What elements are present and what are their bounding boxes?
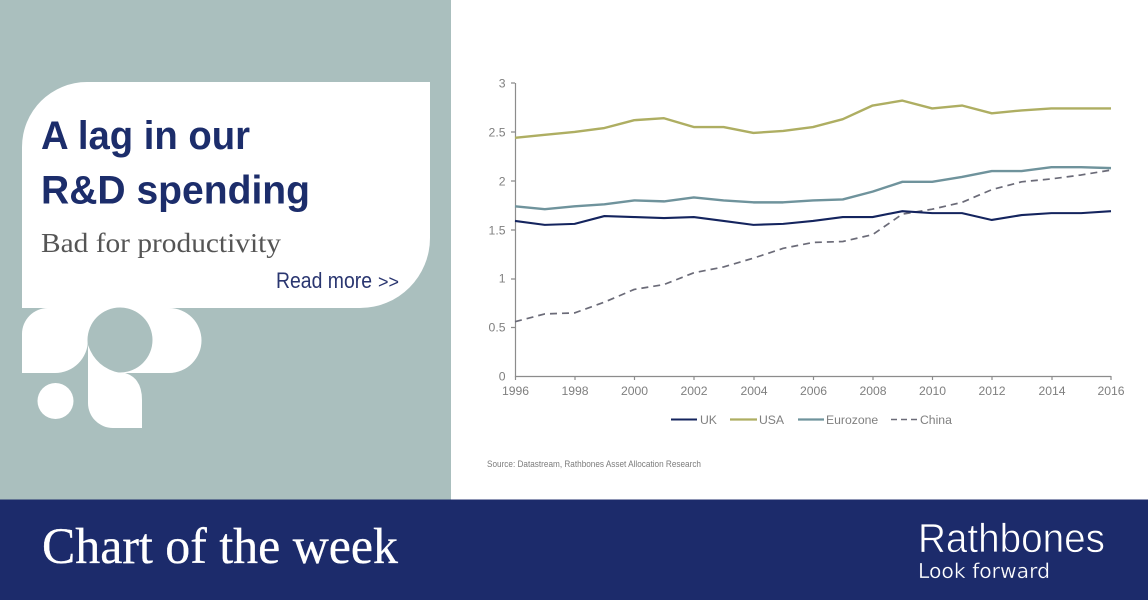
series lines <box>515 101 1111 322</box>
series: UK <box>515 211 1111 225</box>
title: A lag in our <box>41 114 250 158</box>
logo: Rathbones: Rathbones <box>918 515 1105 561</box>
source note: Source: Datastream, Rathbones Asset Allocation Research <box>487 459 701 469</box>
footer heading: Chart of the week <box>42 519 398 575</box>
x axis labels <box>502 384 1125 398</box>
title: R&D spending <box>41 168 310 212</box>
legend: China <box>920 413 952 427</box>
y axis labels: 1.5 <box>489 224 506 238</box>
y axis labels: 2.5 <box>489 126 506 140</box>
left panel background <box>0 0 451 500</box>
x axis labels: 2006 <box>800 384 827 398</box>
legend: USA <box>759 413 785 427</box>
legend <box>671 413 952 427</box>
card shape <box>22 82 430 308</box>
x axis labels: 2000 <box>621 384 648 398</box>
y axis labels: 0 <box>499 370 506 384</box>
y axis labels <box>489 76 506 384</box>
x axis labels: 2008 <box>859 384 887 398</box>
y axis <box>511 83 1111 380</box>
line chart <box>489 76 1125 427</box>
x axis labels: 2012 <box>978 384 1006 398</box>
y axis labels: 2 <box>499 174 506 188</box>
icon: brand motif <box>22 308 202 428</box>
footer bar <box>0 500 1148 600</box>
subtitle: Bad for productivity <box>41 227 281 258</box>
series: China <box>515 170 1111 322</box>
x axis labels: 2016 <box>1097 384 1125 398</box>
legend: Eurozone <box>826 413 878 427</box>
x axis labels: 1998 <box>561 384 589 398</box>
legend: UK <box>700 413 717 427</box>
x axis labels: 2004 <box>740 384 768 398</box>
read more link: Read more <box>276 268 372 293</box>
x axis labels: 2002 <box>680 384 708 398</box>
y axis labels: 3 <box>499 76 506 90</box>
read more link: >> <box>378 272 399 292</box>
x axis labels: 2014 <box>1038 384 1066 398</box>
y axis labels: 1 <box>499 272 506 286</box>
x axis labels: 1996 <box>502 384 529 398</box>
y axis labels: 0.5 <box>489 320 506 334</box>
series: USA <box>515 101 1111 138</box>
headline card <box>22 82 430 308</box>
series: Eurozone <box>515 167 1111 209</box>
x axis labels: 2010 <box>919 384 946 398</box>
logo tagline: Look forward <box>918 559 1050 583</box>
